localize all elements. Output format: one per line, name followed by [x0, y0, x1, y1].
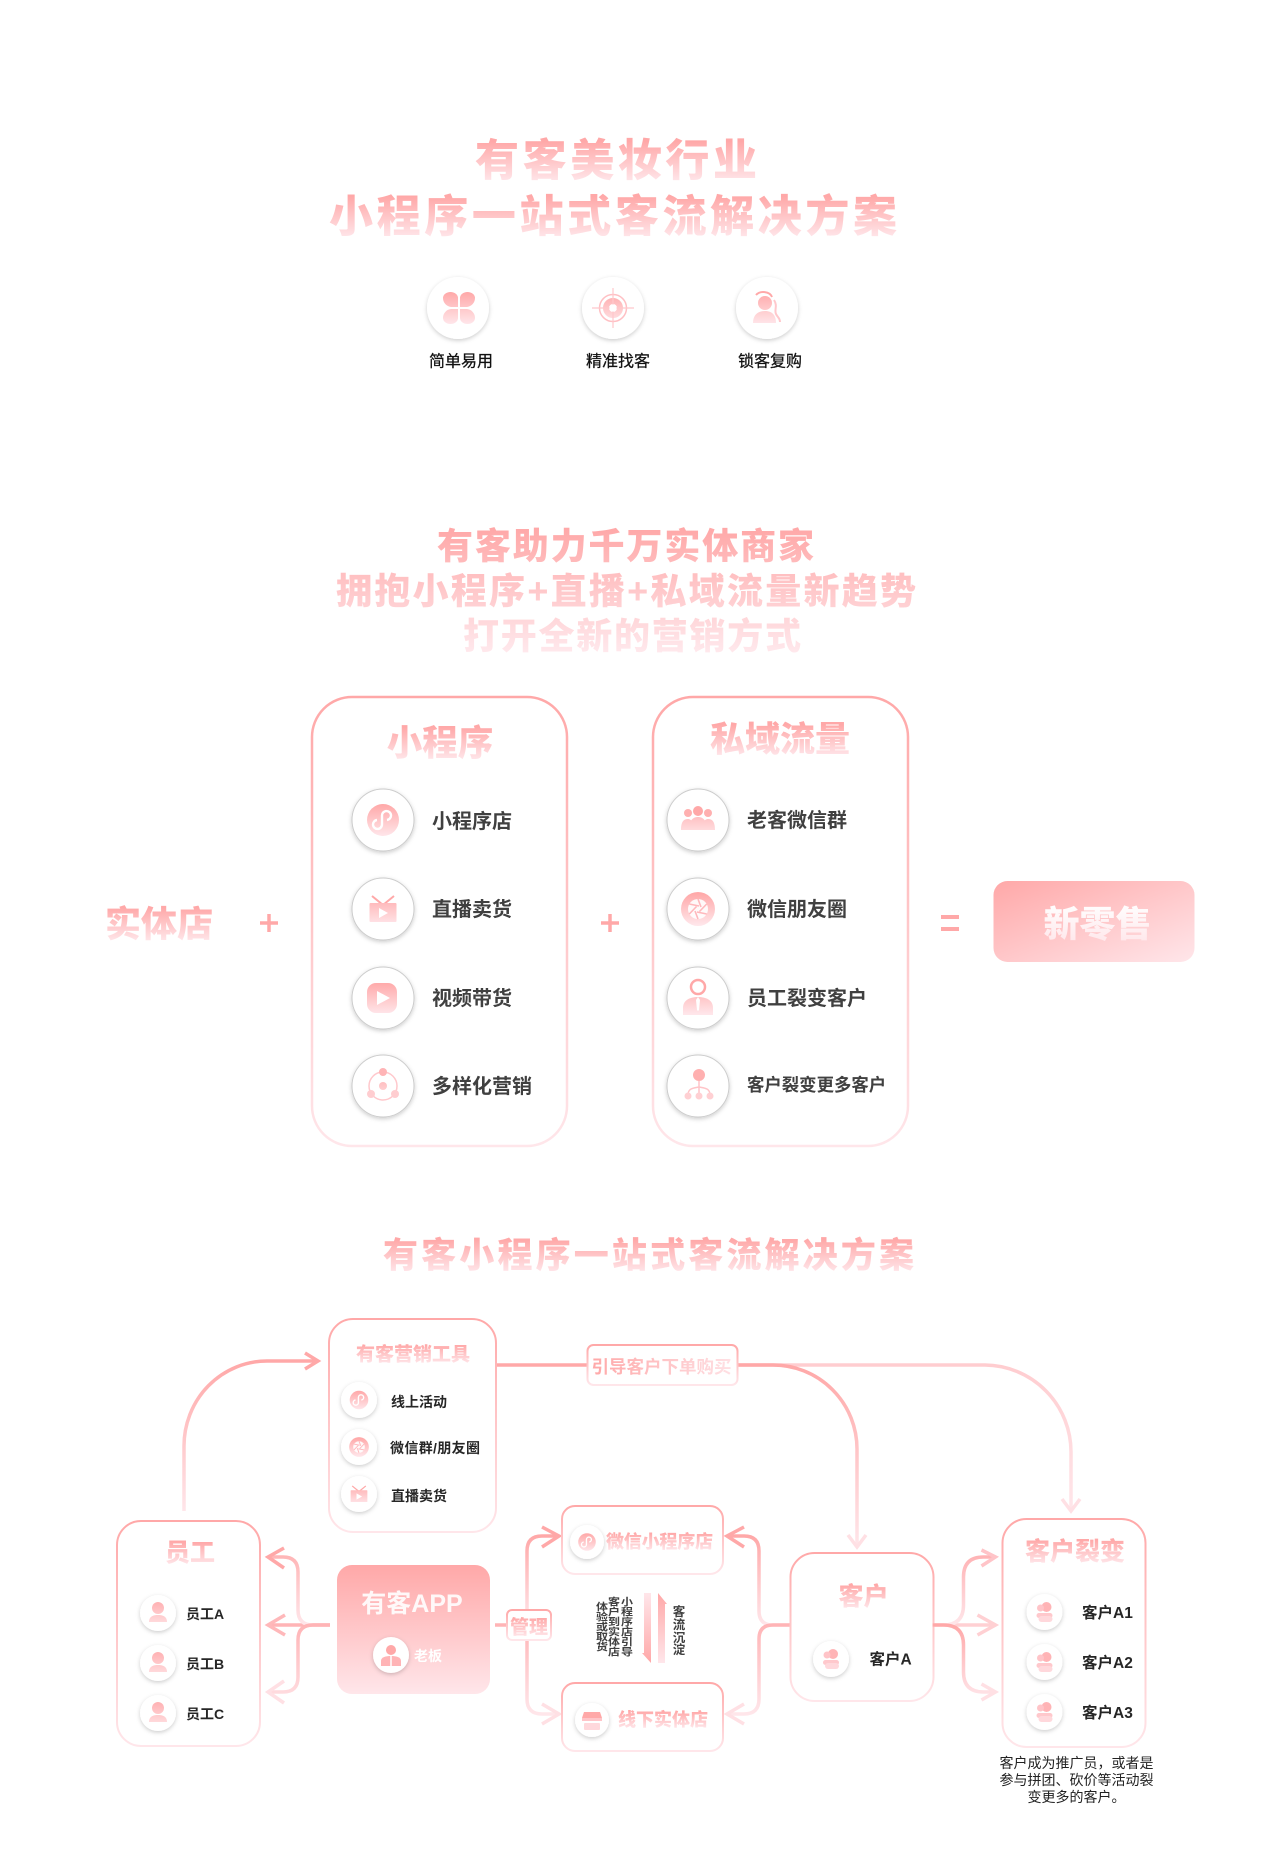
item: staff A: 员工A [186, 1606, 224, 1622]
title: main heading: 有客美妆行业 [475, 136, 757, 186]
arrow: flow back up [658, 1593, 667, 1663]
item: customer A1: 客户A1 [1082, 1603, 1133, 1622]
panel: staff [117, 1521, 260, 1746]
panel: youke app [337, 1565, 490, 1694]
heading: section two [336, 526, 916, 656]
feature: precise targeting [582, 277, 650, 370]
panel: offline store [562, 1683, 723, 1751]
caption: customer fission note [1000, 1755, 1154, 1805]
item: staff fission: 员工裂变客户 [747, 986, 867, 1010]
text: customer flow deposit: 客流沉淀 [673, 1604, 686, 1657]
title: main heading [329, 136, 897, 242]
item: online activities: 线上活动 [391, 1394, 447, 1410]
label: guide customers to buy: 引导客户下单购买 [592, 1357, 732, 1377]
item: wechat groups: 微信群/朋友圈 [390, 1440, 480, 1456]
item: customer A [813, 1641, 912, 1677]
item: mini program store [352, 789, 512, 851]
item: live selling: 直播卖货 [391, 1488, 447, 1504]
arrow: staff to marketing tools [184, 1353, 318, 1511]
panel title: 小程序 [387, 723, 493, 763]
panel: offline store: 线下实体店 [618, 1709, 708, 1730]
feature: simple to use: 简单易用 [429, 352, 493, 370]
item: customer fission [667, 1055, 886, 1117]
item: live selling [341, 1476, 447, 1512]
text: mini store to physical store [596, 1596, 633, 1658]
heading: section two: 拥抱小程序+直播+私域流量新趋势 [336, 570, 916, 612]
panel: wechat mini store: 微信小程序店 [606, 1531, 713, 1552]
item: live selling: 直播卖货 [432, 897, 512, 921]
caption: customer fission note: 参与拼团、砍价等活动裂 [1000, 1772, 1154, 1788]
feature: simple to use [427, 277, 493, 370]
item: staff A [140, 1595, 224, 1631]
feature: lock-in repurchase: 锁客复购 [738, 352, 802, 370]
item: customer A3: 客户A3 [1082, 1703, 1133, 1722]
item: customer A3 [1026, 1694, 1133, 1730]
item: staff C [140, 1695, 224, 1731]
panel: mini program [312, 697, 567, 1146]
text: mini store to physical store: 小程序店引导 [621, 1597, 633, 1658]
heading: section two: 打开全新的营销方式 [463, 616, 801, 656]
item: customer A2: 客户A2 [1082, 1653, 1133, 1672]
arrows: app to staff [268, 1548, 330, 1703]
equals sign [941, 917, 959, 929]
panel title: 客户裂变 [1025, 1537, 1125, 1566]
panel title: 客户 [838, 1582, 889, 1611]
panel: youke app: 老板 [414, 1648, 442, 1664]
item: staff fission [667, 967, 867, 1029]
item: video selling [352, 967, 512, 1029]
label: manage: 管理 [510, 1616, 548, 1638]
item: customer A: 客户A [870, 1650, 912, 1668]
item: wechat groups [341, 1429, 480, 1465]
panel: customer fission [1002, 1519, 1146, 1747]
caption: customer fission note: 客户成为推广员，或者是 [1000, 1755, 1154, 1771]
feature: lock-in repurchase [736, 277, 802, 370]
arrow: marketing tools to customers [496, 1365, 1080, 1547]
item: wechat moments [667, 878, 847, 940]
panel: customer [790, 1553, 934, 1701]
item: wechat moments: 微信朋友圈 [747, 898, 847, 921]
item: customer fission: 客户裂变更多客户 [747, 1075, 886, 1095]
title: main heading: 小程序一站式客流解决方案 [329, 192, 897, 242]
item: old customer group: 老客微信群 [747, 808, 847, 832]
item: staff B [140, 1645, 224, 1681]
item: diversified marketing: 多样化营销 [432, 1075, 532, 1098]
item: live selling [352, 878, 512, 940]
item: mini program store: 小程序店 [432, 809, 512, 833]
panel: youke app: 有客APP [361, 1589, 463, 1618]
boss avatar [373, 1637, 409, 1673]
panel: marketing tools [329, 1319, 496, 1532]
text: mini store to physical store: 客户到实体店 [608, 1596, 620, 1658]
panel title: 员工 [165, 1539, 215, 1567]
label: manage [507, 1610, 551, 1640]
plus sign one [260, 914, 278, 932]
item: video selling: 视频带货 [432, 986, 512, 1010]
result box: new retail [994, 881, 1194, 962]
item: online activities [341, 1382, 447, 1418]
heading: section three: 有客小程序一站式客流解决方案 [383, 1236, 914, 1276]
panel title: 私域流量 [710, 720, 850, 760]
arrows: customer to stores [727, 1527, 791, 1724]
arrow: flow down to store [642, 1593, 651, 1663]
item: diversified marketing [352, 1055, 532, 1117]
text: mini store to physical store: 体验或取货 [596, 1601, 608, 1653]
arrows: customer to fission [932, 1550, 996, 1700]
feature: precise targeting: 精准找客 [586, 352, 650, 370]
label: physical store: 实体店 [105, 904, 213, 944]
plus sign two [601, 914, 619, 932]
panel: private traffic [653, 697, 908, 1146]
heading: section two: 有客助力千万实体商家 [437, 526, 814, 566]
arrows: manage to stores [495, 1527, 559, 1724]
result box: new retail: 新零售 [1043, 904, 1152, 944]
item: customer A1 [1026, 1594, 1133, 1630]
item: old customer group [667, 789, 847, 851]
item: customer A2 [1026, 1644, 1133, 1680]
label: guide customers to buy [588, 1345, 738, 1385]
panel: wechat mini store [562, 1506, 723, 1574]
item: staff C: 员工C [186, 1706, 224, 1722]
panel title: 有客营销工具 [356, 1342, 470, 1366]
item: staff B: 员工B [186, 1656, 224, 1672]
caption: customer fission note: 变更多的客户。 [1028, 1789, 1126, 1805]
